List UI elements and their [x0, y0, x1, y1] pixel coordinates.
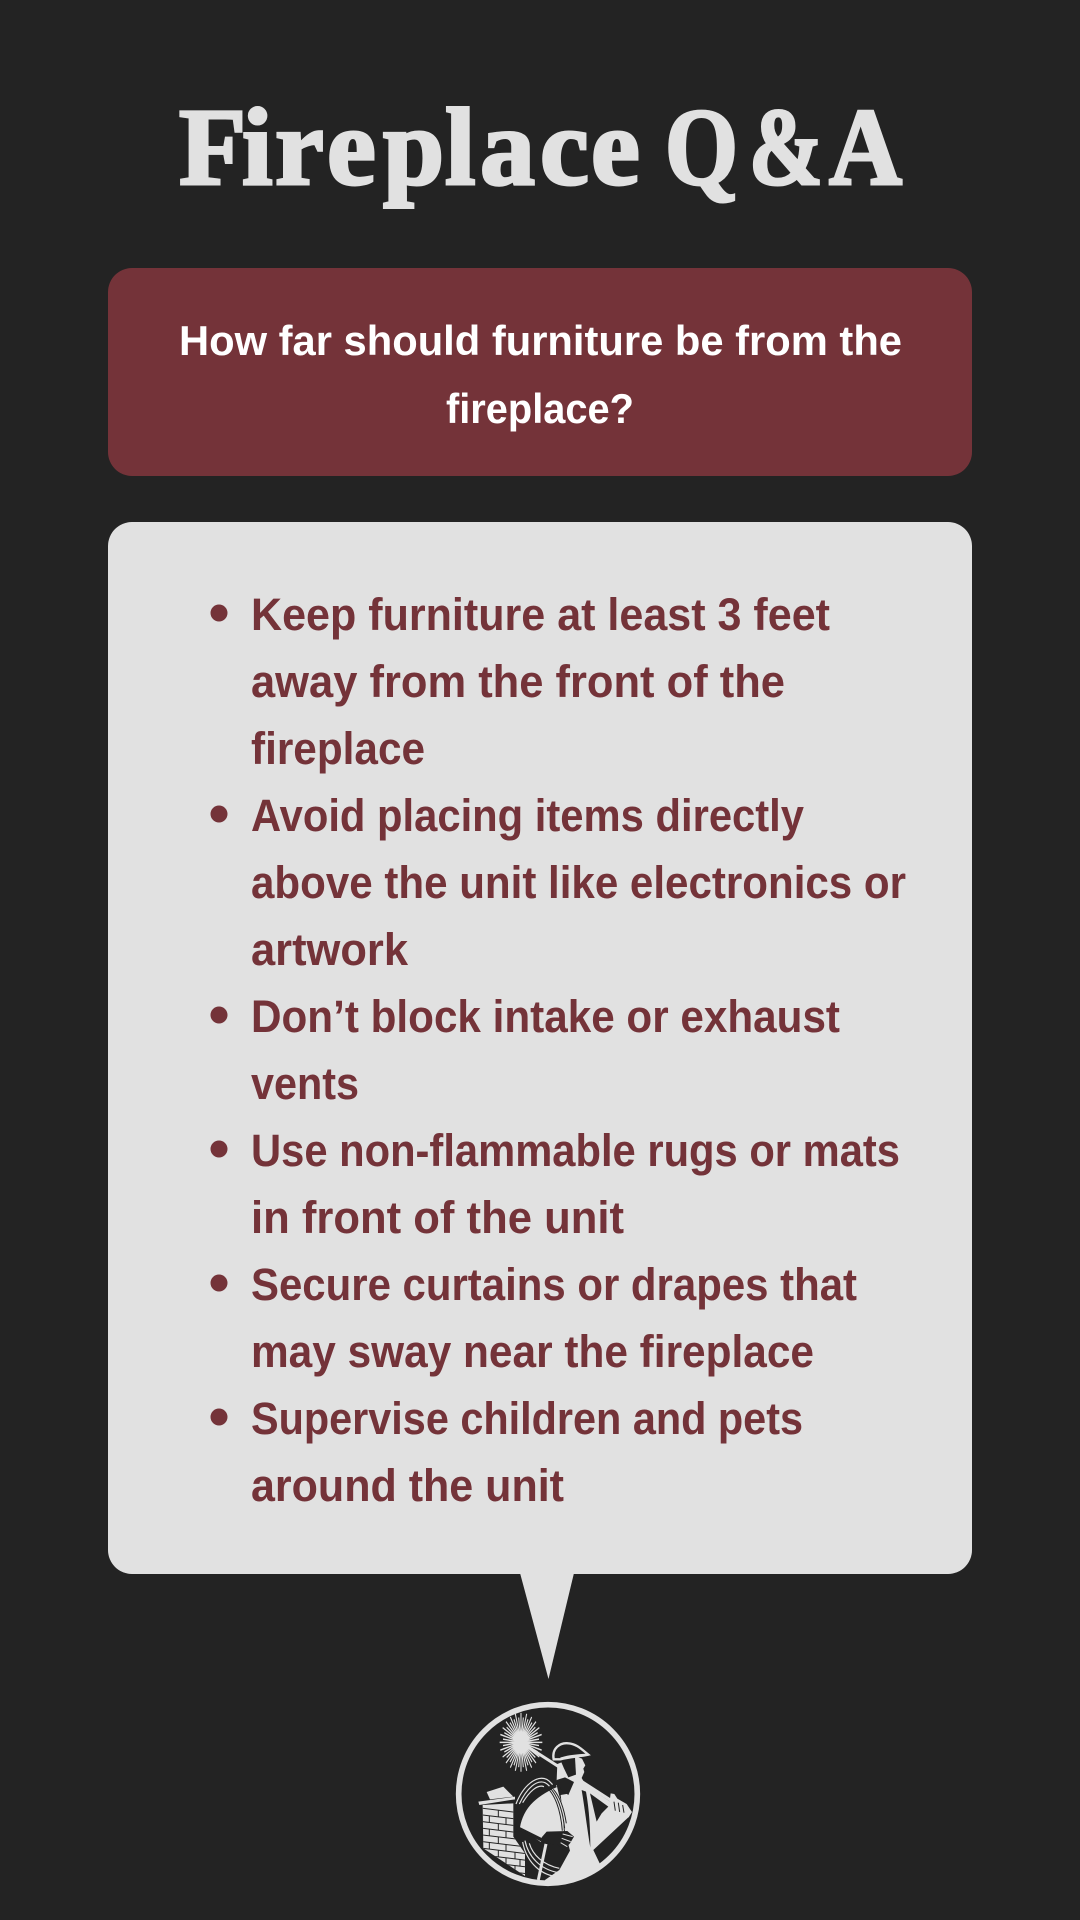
- chimney brush: [500, 1713, 542, 1772]
- hand on coil: [542, 1831, 574, 1845]
- bullet 6: around the unit: [251, 1460, 564, 1511]
- bullet 6: [210, 1393, 803, 1511]
- bullet 2: [210, 790, 906, 975]
- coil outer strands: [516, 1778, 564, 1815]
- coil dark band: [526, 1784, 557, 1812]
- title: [179, 86, 902, 208]
- bullet 1: away from the front of the: [251, 656, 785, 707]
- pole: [528, 1746, 610, 1802]
- coil strands on chest: [549, 1789, 567, 1831]
- question text: fireplace?: [446, 385, 634, 432]
- bullet 1: fireplace: [251, 723, 425, 774]
- chimney: [478, 1787, 527, 1876]
- panel: answer speech bubble: [108, 522, 972, 1679]
- bubble pointer: [520, 1573, 574, 1679]
- bullet 1: [210, 589, 830, 774]
- bullet 5: [210, 1259, 857, 1377]
- dark gap under pole: [590, 1793, 608, 1822]
- question text: How far should furniture be from the: [179, 317, 902, 364]
- bullet 5: Secure curtains or drapes that: [251, 1259, 857, 1310]
- bullet list: [210, 589, 906, 1511]
- title: Fireplace: [179, 86, 640, 208]
- bullet 4: [210, 1125, 900, 1243]
- head shadow: [561, 1757, 576, 1777]
- question text: [179, 317, 902, 432]
- title: Q: [665, 86, 738, 208]
- lower coil: [523, 1841, 559, 1877]
- bullet 2: above the unit like electronics or: [251, 857, 906, 908]
- bullet 2: Avoid placing items directly: [251, 790, 804, 841]
- neck and face: [557, 1757, 587, 1795]
- title: A: [829, 86, 902, 208]
- collar shadow: [557, 1777, 574, 1795]
- torso and right arm: [544, 1786, 628, 1880]
- bullet 2: artwork: [251, 924, 409, 975]
- icon: chimney sweep logo: [459, 1705, 637, 1893]
- cap: [553, 1743, 588, 1759]
- bullet 3: Don’t block intake or exhaust: [251, 991, 840, 1042]
- bullet 3: [210, 991, 840, 1109]
- bullet 4: Use non-flammable rugs or mats: [251, 1125, 900, 1176]
- bullet 4: in front of the unit: [251, 1192, 624, 1243]
- torso shadow line: [582, 1790, 590, 1848]
- sweep arm and coil interior: [520, 1785, 564, 1842]
- panel: question: [108, 268, 972, 476]
- bullet 5: may sway near the fireplace: [251, 1326, 814, 1377]
- bullet 6: Supervise children and pets: [251, 1393, 803, 1444]
- bubble body: [108, 522, 972, 1574]
- bullet 1: Keep furniture at least 3 feet: [251, 589, 830, 640]
- title: &: [749, 86, 823, 208]
- bullet 3: vents: [251, 1058, 359, 1109]
- hand on pole: [610, 1793, 632, 1818]
